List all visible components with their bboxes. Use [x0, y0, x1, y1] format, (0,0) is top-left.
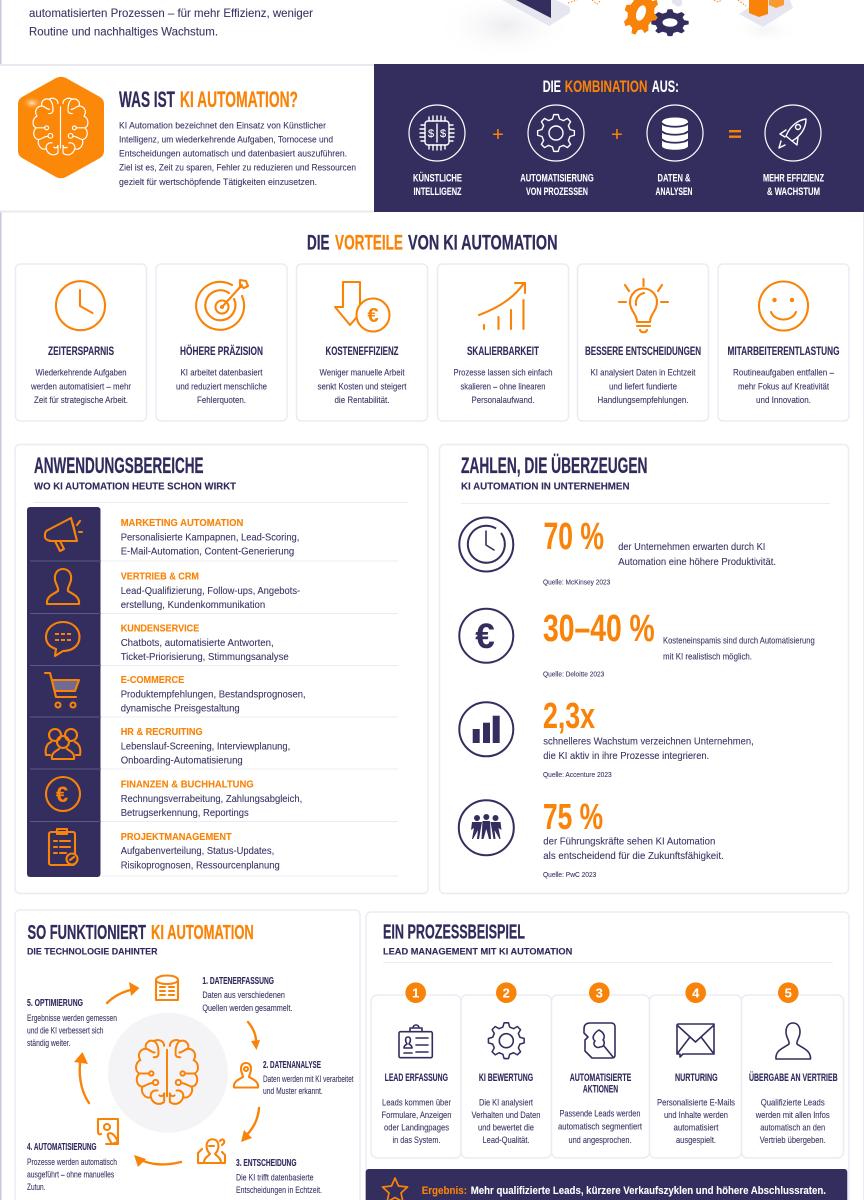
- card text: und reduziert menschliche: [176, 382, 267, 392]
- panel: Mitarbeiterentlastung: [718, 264, 849, 421]
- card title: BESSERE ENTSCHEIDUNGEN: [585, 344, 701, 358]
- card text: Weniger manuelle Arbeit: [320, 368, 405, 378]
- icon: gear: [528, 105, 584, 161]
- icon: rising bars and arrow: [479, 283, 525, 329]
- step 4: [27, 1119, 118, 1192]
- heading: die Vorteile: [307, 230, 558, 254]
- card text: KI arbeitet datenbasiert: [180, 368, 263, 378]
- panel: Zeitersparnis: [16, 264, 146, 421]
- card text: [30, 368, 131, 405]
- text: automatisiert: [674, 1123, 719, 1133]
- text: in das System.: [392, 1135, 440, 1145]
- icon: team: [46, 729, 80, 759]
- icon: falling cost arrow with euro coin: [335, 282, 390, 332]
- card text: skalieren – ohne linearen: [460, 382, 546, 392]
- step card: automatisierte Aktionen: [552, 982, 650, 1158]
- text: und Inhalte werden: [664, 1110, 728, 1120]
- heading: EIN PROZESSBEISPIEL: [383, 922, 525, 944]
- heading: KOMBINATION: [565, 78, 647, 96]
- text: Ticket-Priorisierung, Stimmungsanalyse: [121, 652, 289, 663]
- text: Passende Leads werden: [560, 1108, 640, 1118]
- panel: was ist KI Automation: [0, 64, 374, 212]
- text: [121, 570, 300, 611]
- text: Zutun.: [27, 1182, 45, 1192]
- text: erstellung, Kundenkommunikation: [121, 600, 265, 611]
- card text: die Rentabilität.: [334, 395, 390, 405]
- icon: clipboard: [49, 829, 78, 865]
- definition text: [119, 120, 356, 187]
- text: FINANZEN & BUCHHALTUNG: [121, 778, 254, 790]
- value: 75 %: [543, 796, 603, 837]
- icon: light bulb: [619, 279, 668, 332]
- icon: stopwatch: [459, 518, 513, 572]
- text: Aufgabenverteilung, Status-Updates,: [121, 846, 274, 857]
- card text: [590, 368, 696, 405]
- panel: höhere Präzision: [156, 264, 287, 421]
- arrow: step 5 to 1: [107, 982, 140, 1003]
- row: Kundenservice: [46, 622, 289, 663]
- text: [121, 674, 306, 714]
- text: dynamische Preisgestaltung: [121, 704, 240, 714]
- card text: Routineaufgaben entfallen –: [733, 368, 834, 378]
- panel: bessere Entscheidungen: [578, 264, 708, 421]
- arrow: step 1 to 2: [248, 1022, 260, 1050]
- icon: shopping cart: [45, 673, 79, 708]
- text: Die KI trifft datenbasierte: [236, 1172, 314, 1182]
- operators: +: [492, 124, 504, 146]
- icon: megaphone: [45, 518, 82, 551]
- definition text: KI Automation bezeichnet den Einsatz von Künstlicher: [119, 120, 326, 130]
- source: Quelle: Deloitte 2023: [543, 670, 604, 678]
- description: die KI aktiv in ihre Prozesse integrieren.: [543, 751, 709, 762]
- icon: leadership group: [459, 800, 514, 855]
- icon: central brain: [108, 1013, 228, 1133]
- text: [382, 1097, 452, 1145]
- labels: AUTOMATISIERUNG: [520, 172, 594, 184]
- text: automatisch segmentiert: [558, 1122, 642, 1132]
- heading: AUS:: [652, 78, 679, 96]
- card text: mehr Fokus auf Kreativität: [738, 382, 829, 392]
- card text: [733, 368, 834, 405]
- number badge: [685, 982, 706, 1003]
- stat: 30–40 %: [459, 608, 815, 678]
- icon: euro coin: [46, 777, 80, 811]
- description: mit KI realistisch möglich.: [663, 652, 752, 662]
- text: und Muster erkannt.: [263, 1086, 323, 1096]
- step card: Übergabe an Vertrieb: [742, 982, 844, 1158]
- heading: DIE: [543, 78, 561, 96]
- text: [657, 1097, 735, 1145]
- panel: Kosteneffizienz: [296, 264, 428, 421]
- navy icon column: [27, 507, 100, 877]
- card text: [318, 368, 407, 405]
- text: [121, 517, 299, 558]
- title: NURTURING: [675, 1072, 718, 1084]
- number badge: 1: [412, 986, 419, 1000]
- description: Automation eine höhere Produktivität.: [618, 557, 776, 568]
- icon: gear: [488, 1023, 524, 1059]
- step 5: [27, 997, 117, 1048]
- title: AUTOMATISIERTE: [570, 1072, 631, 1084]
- text: [121, 622, 289, 663]
- icon: AI chip: [409, 105, 465, 161]
- description: als entscheidend für die Zukunftsfähigkeit.: [543, 851, 724, 862]
- number badge: 2: [503, 986, 510, 1000]
- text: Produktempfehlungen, Bestandsprognosen,: [121, 690, 306, 700]
- panel: Skalierbarkeit: [438, 264, 568, 421]
- text: VERTRIEB & CRM: [121, 570, 199, 582]
- icon: database: [647, 105, 703, 161]
- text: Personalisierte E-Mails: [657, 1097, 735, 1107]
- illustration: laptop, gears and charts: [435, 0, 801, 60]
- title: KI BEWERTUNG: [479, 1072, 533, 1084]
- icon: ID badge: [399, 1025, 432, 1058]
- text: Onboarding-Automatisierung: [121, 756, 243, 766]
- text: Vertrieb übergeben.: [760, 1135, 826, 1145]
- card title: HÖHERE PRÄZISION: [180, 344, 263, 358]
- text: KUNDENSERVICE: [121, 622, 199, 634]
- icon: euro: €: [475, 617, 495, 656]
- description: [618, 542, 776, 568]
- definition text: gezielt für wertschöpfende Tätigkeiten einzusetzen.: [119, 177, 317, 187]
- text: [121, 831, 280, 872]
- title: [570, 1072, 631, 1096]
- panel: ein Prozessbeispiel: [366, 912, 849, 1200]
- text: [202, 975, 292, 1013]
- row: Finanzen und Buchhaltung: [46, 777, 302, 819]
- text: Leads kommen über: [382, 1097, 451, 1107]
- text: werden mit allen Infos: [755, 1110, 830, 1120]
- description: Kosteneinspamis sind durch Automatisierung: [663, 636, 815, 646]
- text: Chatbots, automatisierte Antworten,: [121, 638, 274, 649]
- heading: KI AUTOMATION?: [180, 87, 298, 112]
- arrow: step 4 to 5: [74, 1052, 89, 1103]
- text: [121, 778, 302, 819]
- value: 2,3x: [543, 695, 596, 736]
- number badge: [589, 982, 610, 1003]
- card text: KI analysiert Daten in Echtzeit: [590, 368, 696, 378]
- text: 3. ENTSCHEIDUNG: [236, 1157, 296, 1169]
- description: [543, 736, 754, 762]
- card text: Zeit für strategische Arbeit.: [34, 395, 128, 405]
- subheading: LEAD MANAGEMENT MIT KI AUTOMATION: [383, 946, 572, 958]
- subheading: KI AUTOMATION IN UNTERNEHMEN: [461, 480, 630, 492]
- text: automatisch an den: [760, 1123, 825, 1133]
- number badge: [496, 982, 517, 1003]
- row: Vertrieb und CRM: [47, 569, 300, 611]
- step 2: [234, 1059, 354, 1096]
- icon: person: [776, 1023, 811, 1059]
- text: Lebenslauf-Screening, Interviewplanung,: [121, 742, 290, 752]
- card text: [176, 368, 267, 405]
- step card: Lead Erfassung: [371, 982, 461, 1158]
- heading: die Vorteile: VORTEILE: [335, 230, 403, 254]
- icon: bar chart: [459, 702, 513, 756]
- intro text: [29, 6, 313, 38]
- text: [121, 726, 290, 766]
- subheading: DIE TECHNOLOGIE DAHINTER: [27, 946, 158, 958]
- row: Projektmanagement: [49, 829, 280, 872]
- text: [472, 1097, 540, 1145]
- number badge: 5: [785, 986, 792, 1000]
- icon: AI chip: $: [428, 128, 434, 140]
- description: der Führungskräfte sehen KI Automation: [543, 836, 716, 848]
- text: oder Landingpages: [384, 1123, 449, 1133]
- labels: VON PROZESSEN: [526, 186, 588, 198]
- operators: [492, 124, 741, 146]
- number badge: 3: [596, 986, 603, 1000]
- text: Quellen werden gesammelt.: [202, 1003, 292, 1013]
- intro text: automatisierten Prozessen – für mehr Effizienz, weniger: [29, 6, 313, 20]
- description: schnelleres Wachstum verzeichnen Unternehmen,: [543, 736, 754, 748]
- text: Personalisierte Kampapnen, Lead-Scoring,: [121, 532, 299, 544]
- labels: & WACHSTUM: [767, 186, 820, 198]
- value: 30–40 %: [543, 608, 655, 650]
- icon: decision maker: [198, 1139, 225, 1163]
- panel: die Kombination aus: [374, 64, 864, 212]
- definition text: Entscheidungen automatisch und datenbasiert auszuführen.: [119, 148, 347, 158]
- number badge: [405, 982, 426, 1003]
- heading: KI AUTOMATION: [151, 922, 254, 944]
- intro text: Routine und nachhaltiges Wachstum.: [29, 24, 218, 38]
- step 3: [198, 1139, 322, 1195]
- title: LEAD ERFASSUNG: [385, 1072, 448, 1084]
- icon: euro coin: €: [56, 782, 68, 807]
- icon: chat bubble: [46, 622, 80, 656]
- text: ausgespielt.: [676, 1135, 716, 1145]
- text: und angesprochen.: [568, 1135, 632, 1145]
- text: Rechnungsverrabeitung, Zahlungsabgleich,: [121, 794, 302, 805]
- icon: automation sheet: [98, 1119, 118, 1144]
- heading: die Vorteile: VON KI AUTOMATION: [408, 230, 558, 254]
- step 5: und die KI verbessert sich: [27, 1026, 104, 1036]
- icon: star: [382, 1178, 408, 1200]
- step 5: ständig weiter.: [27, 1038, 71, 1048]
- result text: Ergebnis:: [422, 1185, 467, 1197]
- text: Betrugserkennung, Reportings: [121, 808, 249, 819]
- source: Quelle: PwC 2023: [543, 870, 596, 879]
- card text: und Innovation.: [756, 395, 811, 405]
- labels: DATEN &: [658, 172, 691, 184]
- card title: ZEITERSPARNIS: [48, 344, 114, 358]
- heading: WAS IST: [119, 87, 175, 112]
- text: E-Mail-Automation, Content-Generierung: [121, 546, 294, 558]
- icon: AI chip: $: [440, 128, 446, 140]
- icon: euro: [459, 609, 513, 663]
- text: Verhalten und Daten: [472, 1110, 540, 1120]
- source: Quelle: McKinsey 2023: [543, 578, 610, 586]
- text: Prozesse werden automatisch: [27, 1157, 117, 1167]
- text: [236, 1157, 322, 1195]
- labels: ANALYSEN: [656, 186, 693, 198]
- text: 1. DATENERFASSUNG: [202, 975, 274, 987]
- icon: automation document: [584, 1023, 615, 1058]
- labels: MEHR EFFIZIENZ: [763, 172, 824, 184]
- card text: [454, 368, 552, 405]
- text: PROJEKTMANAGEMENT: [121, 831, 232, 843]
- stat: 75 %: [459, 796, 724, 879]
- card text: Personalaufwand.: [472, 395, 534, 405]
- text: und bewertet die: [478, 1123, 534, 1133]
- arrow: step 2 to 3: [241, 1108, 259, 1142]
- heading: [119, 87, 298, 112]
- card text: und liefert fundierte: [609, 382, 677, 392]
- text: Risikoprognosen, Ressourcenplanung: [121, 860, 280, 872]
- stat: 2,3x: [459, 695, 754, 779]
- text: 4. AUTOMATISIERUNG: [27, 1141, 96, 1153]
- step card: KI Bewertung: [461, 982, 552, 1158]
- text: E-COMMERCE: [121, 674, 184, 686]
- result text: Mehr qualifizierte Leads, kürzere Verkaufszyklen und höhere Abschlussraten.: [471, 1185, 826, 1197]
- icon: clock: [56, 281, 105, 330]
- labels: [413, 172, 824, 198]
- icon: analyst: [234, 1063, 258, 1088]
- subheading: WO KI AUTOMATION HEUTE SCHON WIRKT: [34, 480, 237, 492]
- icon: target: [196, 280, 248, 330]
- text: Lead-Qualität.: [482, 1135, 530, 1145]
- description: [543, 836, 724, 862]
- panel: hero header: [29, 0, 801, 60]
- heading: SO FUNKTIONIERT: [28, 922, 146, 944]
- value: 70 %: [544, 516, 604, 558]
- text: [558, 1108, 642, 1145]
- arrow: step 3 to 4: [134, 1155, 181, 1167]
- text: HR & RECRUITING: [121, 726, 203, 738]
- text: Qualifizierte Leads: [761, 1097, 825, 1107]
- step 5: Ergebnisse werden gemessen: [27, 1013, 117, 1023]
- icon: falling cost arrow with euro coin: €: [367, 305, 379, 327]
- icon: smiley: [759, 282, 808, 330]
- text: [263, 1059, 354, 1096]
- result banner: [366, 1169, 847, 1200]
- card title: KOSTENEFFIZIENZ: [326, 344, 398, 358]
- step 1: [156, 975, 292, 1013]
- text: Die KI analysiert: [479, 1097, 533, 1107]
- text: Daten aus verschiedenen: [202, 990, 285, 1000]
- text: 2. DATENANALYSE: [263, 1059, 321, 1071]
- text: ausgeführt – ohne manuelles: [27, 1170, 115, 1180]
- description: [663, 636, 815, 662]
- icon: person: [47, 569, 79, 604]
- definition text: Intelligenz, um wiederkehrende Aufgaben, Tornocese und: [119, 134, 333, 144]
- panel: so funktioniert KI Automation: [15, 910, 360, 1200]
- text: MARKETING AUTOMATION: [121, 517, 243, 529]
- text: [27, 1141, 117, 1192]
- card text: Wiederkehrende Aufgaben: [36, 368, 126, 378]
- description: der Unternehmen erwarten durch KI: [618, 542, 765, 553]
- step 5: 5. OPTIMIERUNG: [27, 997, 83, 1009]
- card text: Prozesse lassen sich einfach: [454, 368, 552, 378]
- text: [755, 1097, 830, 1145]
- icon: data table: [156, 976, 178, 1000]
- card title: SKALIERBARKEIT: [467, 344, 540, 358]
- text: Lead-Qualifizierung, Follow-ups, Angebots-: [121, 586, 300, 597]
- panel: Zahlen, die überzeugen: [440, 444, 848, 894]
- title: AKTIONEN: [583, 1084, 618, 1096]
- row: Marketing Automation: [45, 517, 299, 558]
- heading: ANWENDUNGSBEREICHE: [34, 453, 204, 478]
- icon: brain hexagon: [18, 77, 104, 178]
- text: Daten werden mit KI verarbeitet: [263, 1074, 354, 1084]
- definition text: Ziel ist es, Zeit zu sparen, Fehler zu reduzieren und Ressourcen: [119, 162, 356, 172]
- icon: envelope: [677, 1024, 714, 1057]
- labels: INTELLIGENZ: [414, 186, 462, 198]
- text: Entscheidungen in Echtzeit.: [236, 1185, 322, 1195]
- card text: Fehlerquoten.: [197, 395, 246, 405]
- heading: ZAHLEN, DIE ÜBERZEUGEN: [461, 453, 648, 478]
- row: E-Commerce: [45, 673, 306, 714]
- text: Formulare, Anzeigen: [382, 1110, 452, 1120]
- number badge: 4: [692, 986, 700, 1000]
- stat: 70 %: [459, 516, 776, 586]
- icon: rocket: [765, 105, 821, 161]
- operators: +: [611, 124, 623, 146]
- panel: Anwendungsbereiche: [15, 444, 428, 894]
- step card: Nurturing: [650, 982, 742, 1158]
- number badge: [778, 982, 799, 1003]
- row: HR und Recruiting: [46, 726, 290, 766]
- source: Quelle: Accenture 2023: [543, 770, 612, 779]
- card text: werden automatisiert – mehr: [30, 382, 131, 392]
- card text: Handlungsempfehlungen.: [598, 395, 688, 405]
- card text: senkt Kosten und steigert: [318, 382, 407, 392]
- heading: die Vorteile: DIE: [307, 230, 330, 254]
- labels: KÜNSTLICHE: [413, 172, 462, 184]
